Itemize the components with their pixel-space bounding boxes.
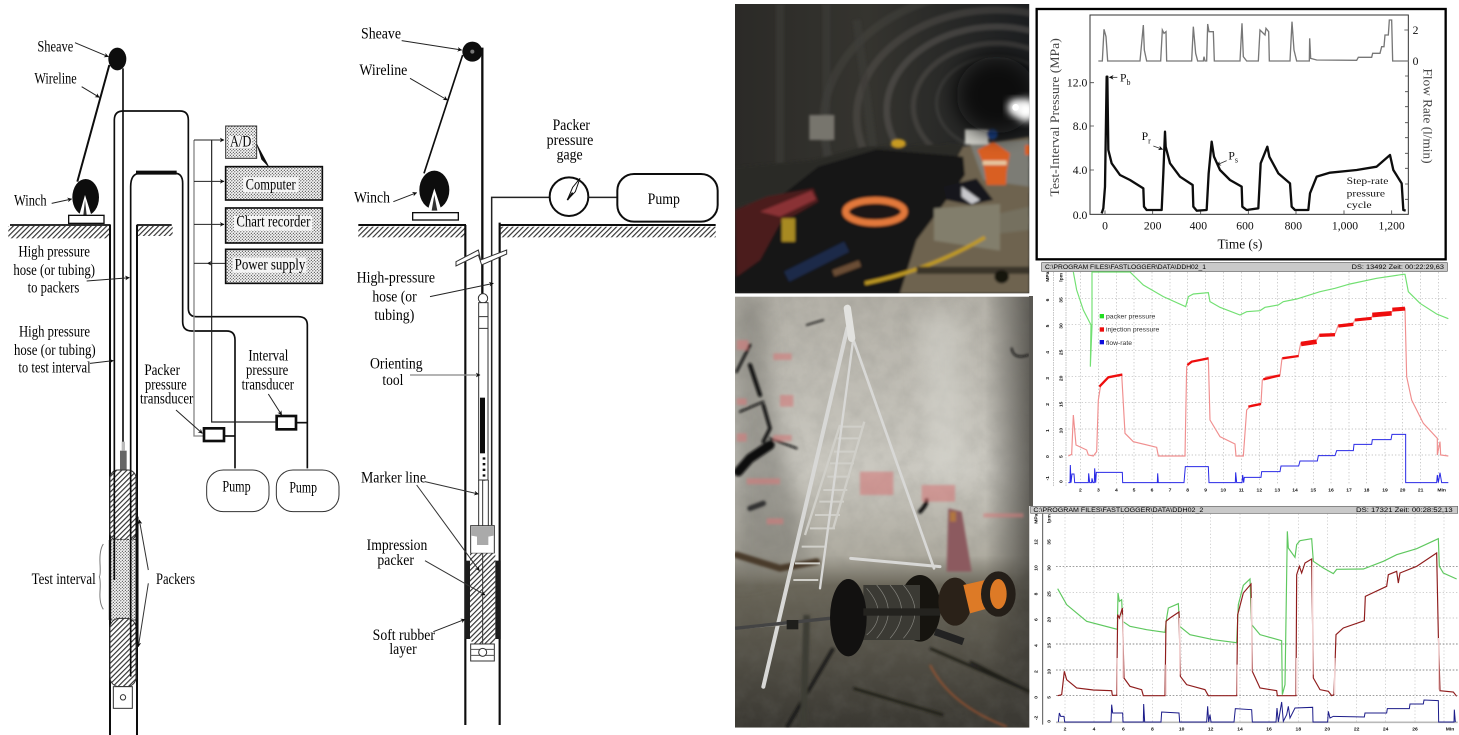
annotation: Pb: b [1126,78,1130,87]
label: impression packer: Impression [367,537,427,554]
label: packers: Packers [156,571,195,588]
y axis labels: 8.0 [1073,120,1087,133]
y axis labels: 0.0 [1073,209,1087,222]
title bar [1031,506,1458,514]
flow axis labels: 2 [1413,24,1419,37]
pump 2 [276,470,339,512]
flow scale labels: 30 [1047,565,1053,571]
photo: tripod with cable reels [735,297,1030,728]
flow scale labels: 35 [1047,539,1053,545]
y axis labels: 4.0 [1073,164,1087,177]
label: packer pressure gage: Packer [553,117,591,134]
pressure scale labels: 2 [1045,403,1051,406]
hose to test interval [114,111,307,580]
pressure scale labels: 0 [1033,696,1039,699]
chart frame [1037,9,1446,259]
photo: tunnel with test equipment [735,4,1030,294]
x axis labels: 7 [1169,488,1172,494]
packer pressure transducer symbol [204,428,235,441]
x axis labels: 19 [1382,488,1388,494]
y axes [1041,514,1044,725]
arrows: marker line [417,482,479,571]
wireline [424,55,463,173]
left axis title: Test-Interval Pressure (MPa) [1048,38,1062,196]
x axis labels: 10 [1179,727,1185,733]
pressure scale labels: -2 [1033,716,1039,720]
label: packer pressure transducer [140,362,194,407]
label: hose to packers: High pressure [18,244,90,261]
horizontal grid [1056,566,1458,696]
label: impression packer: packer [377,552,415,569]
flow scale labels: 10 [1047,669,1053,674]
annotation: step-rate pressure cycle [1347,176,1388,211]
label: marker line: Marker line [361,470,426,487]
label: wireline: Wireline [34,70,77,87]
y axes [1053,272,1066,487]
x axis labels: 800 [1285,219,1302,232]
pressure scale labels: 6 [1033,618,1039,621]
break symbol [456,250,507,266]
x axis labels: 3 [1097,488,1100,494]
pressure scale labels: 4 [1033,644,1039,647]
pressure scale labels: 5 [1045,324,1051,327]
grid [1065,514,1444,723]
label: impression packer [367,537,427,569]
flow scale labels: 5 [1058,455,1064,458]
legend [1100,314,1160,347]
packer pressure line [1073,272,1448,367]
pressure line [1102,77,1406,213]
annotation: step-rate pressure cycle: Step-rate [1347,176,1388,187]
label: orienting tool [370,355,423,389]
arrow: winch [393,193,417,202]
label: hose to packers: to packers [28,280,79,297]
x axis labels: 8 [1186,488,1189,494]
pump: Pump [648,191,680,208]
x axis labels [1064,727,1454,733]
x axis labels: 8 [1151,727,1154,733]
flow scale labels: lpm [1058,272,1064,282]
axis ticks [1090,30,1408,214]
wire in borehole [120,68,125,451]
arrow: packer transducer [176,410,202,433]
flow scale labels [1058,272,1064,483]
impression packer [465,553,501,644]
annotation: Ps [1217,149,1238,165]
flow scale labels [1047,514,1053,723]
chart: logger record DDH02_1 [1042,263,1448,494]
label: wireline: Wireline [359,62,407,79]
label: packer pressure gage [547,117,593,163]
x axis labels: 2 [1079,488,1082,494]
label: high-pressure hose: tubing) [374,307,414,324]
x axis labels: 600 [1236,219,1254,232]
injection pressure plateaus [1099,309,1405,407]
flow scale labels: 20 [1058,375,1064,381]
title bar: C:\PROGRAM FILES\FASTLOGGER\DATA\DDH02_2 [1033,507,1204,514]
label: interval pressure transducer [242,348,295,393]
pressure scale labels: 10 [1033,565,1039,571]
arrow: sheave [75,43,108,57]
pump 1 [207,470,269,512]
hose [492,197,549,525]
x axis labels: 10 [1221,488,1226,494]
flow scale labels: 0 [1058,480,1064,483]
x axis labels: 16 [1328,488,1334,494]
pressure scale labels: 0 [1045,455,1051,458]
flow scale labels: 10 [1058,428,1064,433]
pressure scale labels: MPa [1033,513,1039,524]
marker lines [479,480,488,527]
label: hose to packers [13,244,95,297]
annotation: Pr [1142,130,1163,149]
box: chart recorder: Chart recorder [236,214,311,231]
arrow: high-pressure hose [430,283,493,297]
flow scale labels: 0 [1047,720,1053,723]
label: packer pressure gage: pressure [547,132,593,149]
x axis labels: 12 [1257,488,1262,494]
pump [617,174,718,222]
signal wires [194,140,277,436]
arrow: wireline [410,78,447,100]
brace: test interval [99,544,103,609]
arrow: wireline [82,87,99,97]
icon: winch [69,179,104,223]
pressure scale labels: -1 [1045,476,1051,481]
pressure scale labels: 1 [1045,429,1051,432]
label: high-pressure hose: High-pressure [357,270,435,287]
label: packer pressure transducer: pressure [145,376,187,393]
title bar: DS: 17321 Zeit: 00:28:52,13 [1356,507,1453,514]
injection pressure line [1068,308,1448,456]
label: high-pressure hose: hose (or [372,289,417,306]
icon: sheave [108,48,126,70]
pressure scale labels: 2 [1033,670,1039,673]
rising limb highlights [1117,565,1439,695]
label: high-pressure hose [357,270,435,324]
pump 1: Pump [222,479,251,496]
pressure scale labels: 3 [1045,377,1051,380]
flow scale labels: 25 [1047,591,1053,597]
arrow: impression packer [425,561,485,595]
box: computer: Computer [246,176,296,193]
packer pressure line [1058,531,1457,695]
grid [1065,272,1448,483]
wireline [77,65,109,182]
pump 2: Pump [289,480,317,497]
label: interval pressure transducer: Interval [248,348,289,365]
flow scale labels: 15 [1058,401,1064,407]
x axis labels: 200 [1144,219,1162,232]
label: test interval: Test interval [32,571,96,588]
title bar [1042,263,1447,271]
pressure scale labels: MPa [1045,271,1051,282]
flow scale labels: 30 [1058,323,1064,329]
legend: packer pressure [1106,314,1156,321]
orienting tool [478,294,488,481]
x axis labels: 1,200 [1379,219,1405,232]
flow axis labels [1413,24,1419,68]
pressure scale labels: 6 [1045,298,1051,301]
connecting line [588,195,617,200]
label: orienting tool: Orienting [370,355,423,372]
arrow: winch [52,199,72,203]
flow-rate line [1058,700,1455,722]
label: hose to test interval: High pressure [19,324,90,341]
x axis labels: 4 [1115,488,1118,494]
plot area [1090,15,1408,214]
arrow: hose to packers [87,278,129,281]
ground surface [358,225,716,237]
packer bottom [471,644,494,661]
pressure scale labels: 12 [1033,539,1039,545]
x axis labels: 22 [1354,727,1360,733]
hose to packers [131,173,235,677]
label: hose to test interval: hose (or tubing) [14,342,96,359]
x axis labels: Min [1446,727,1454,733]
interval pressure transducer symbol [277,416,307,429]
x axis labels: Min [1437,488,1446,494]
annotation: step-rate pressure cycle: cycle [1347,200,1372,211]
flow scale labels: 15 [1047,643,1053,648]
x axis labels: 11 [1239,488,1244,494]
pressure scale labels [1045,271,1051,481]
ground surface [8,225,173,238]
x axis labels: 16 [1266,727,1272,733]
label: packer pressure gage: gage [557,146,583,163]
label: hose to packers: hose (or tubing) [13,262,95,279]
x axis labels: 2 [1064,727,1067,733]
x axis labels: 21 [1418,488,1424,494]
flow rate line [1098,20,1408,61]
box: A/D [226,126,257,158]
x axis labels: 6 [1122,727,1125,733]
annotation: Ps: s [1235,156,1238,165]
packer pressure gauge [550,177,588,216]
x axis labels: 26 [1412,727,1418,733]
x axis labels: 6 [1151,488,1154,494]
x axis labels: 24 [1383,727,1389,733]
icon: winch [413,171,458,220]
borehole walls [465,223,500,725]
label: packer pressure transducer: Packer [144,362,181,379]
diagram: impression packer setup [354,25,718,725]
arrow: A/D to computer [257,144,269,167]
x axis labels: 14 [1237,727,1243,733]
x axis labels: 13 [1275,488,1280,494]
x axis labels: 1,000 [1332,219,1358,232]
flow scale labels: 5 [1047,696,1053,699]
flow-rate line [1068,434,1448,483]
label: hose to test interval: to test interval [18,360,91,377]
box: computer [226,167,322,200]
chart: test-interval pressure and flow rate [1037,9,1446,259]
flow scale labels: 25 [1058,349,1064,355]
arrow: interval transducer [268,394,282,415]
label: soft rubber layer [373,627,436,658]
x axis labels [1102,219,1405,232]
x axis labels: 400 [1190,219,1207,232]
tripod [735,308,940,687]
icon: sheave [462,42,482,62]
flow scale labels: 20 [1047,617,1053,622]
x axis labels: 15 [1311,488,1316,494]
x axis title: Time (s) [1217,237,1262,252]
flow axis labels: 0 [1413,55,1419,68]
pressure scale labels: 4 [1045,351,1051,354]
label: soft rubber layer: Soft rubber [373,627,436,644]
arrows: packers [138,520,148,647]
box: chart recorder [226,208,322,243]
legend: injection pressure [1106,327,1160,334]
injection pressure line [1058,553,1457,696]
arrow: orienting tool [410,373,480,377]
flow scale labels: lpm [1047,514,1053,523]
x axis labels: 12 [1208,727,1214,733]
x axis labels: 18 [1296,727,1301,733]
photo edge strip [1029,296,1033,506]
hose crossover [136,167,177,179]
wire in borehole [479,48,486,294]
title bar: DS: 13492 Zeit: 00:22:29,63 [1352,264,1444,271]
light horizontal grid [1056,592,1458,618]
label: orienting tool: tool [382,372,404,389]
flow scale labels: 35 [1058,297,1064,303]
x axis labels: 0 [1102,219,1108,232]
pressure scale labels [1033,513,1039,720]
box: power supply [226,249,322,283]
annotation: Pb: P [1120,72,1126,85]
label: winch: Winch [14,193,47,210]
x axis labels: 14 [1292,488,1298,494]
cable reels [735,571,1016,656]
pressure scale labels: 8 [1033,592,1039,595]
packer assembly [110,442,137,708]
x axis labels: 4 [1093,727,1096,733]
label: winch: Winch [354,190,390,207]
x axis labels: 18 [1364,488,1370,494]
title bar: C:\PROGRAM FILES\FASTLOGGER\DATA\DDH02_1 [1045,264,1206,271]
x axis labels: 9 [1204,488,1207,494]
x axis labels: 17 [1346,488,1352,494]
x axis labels: 20 [1400,488,1406,494]
flow-rate baseline [1056,720,1458,725]
label: hose to test interval [14,324,96,377]
annotation: Ps: P [1228,149,1235,162]
label: sheave: Sheave [361,25,401,42]
borehole walls [110,225,137,735]
x axis labels [1079,488,1446,494]
legend: flow-rate [1106,340,1132,347]
annotation: Pr: r [1148,136,1151,145]
chart: logger record DDH02_2 [1031,506,1458,733]
arrow: hose to test interval [90,361,113,363]
annotation: Pb [1109,72,1130,87]
box: A/D: A/D [230,134,251,151]
label: interval pressure transducer: pressure [246,362,288,379]
label: packer pressure transducer: transducer [140,390,194,407]
packer head [471,526,494,553]
x axis labels: 20 [1325,727,1330,733]
label: interval pressure transducer: transducer [242,376,295,393]
arrow: sheave [402,41,462,50]
diagram: hydraulic fracturing wireline setup [8,39,339,735]
annotation: Pr: P [1142,130,1148,143]
box: power supply: Power supply [235,256,305,273]
label: sheave: Sheave [37,39,73,56]
right axis title: Flow Rate (l/min) [1420,68,1434,163]
x axis labels: 5 [1133,488,1136,494]
y axis labels: 12.0 [1067,77,1087,90]
annotation: step-rate pressure cycle: pressure [1347,189,1385,200]
ladder [793,422,864,580]
arrow: soft rubber layer [433,619,465,632]
label: soft rubber layer: layer [389,641,417,658]
y axis labels [1067,77,1087,222]
